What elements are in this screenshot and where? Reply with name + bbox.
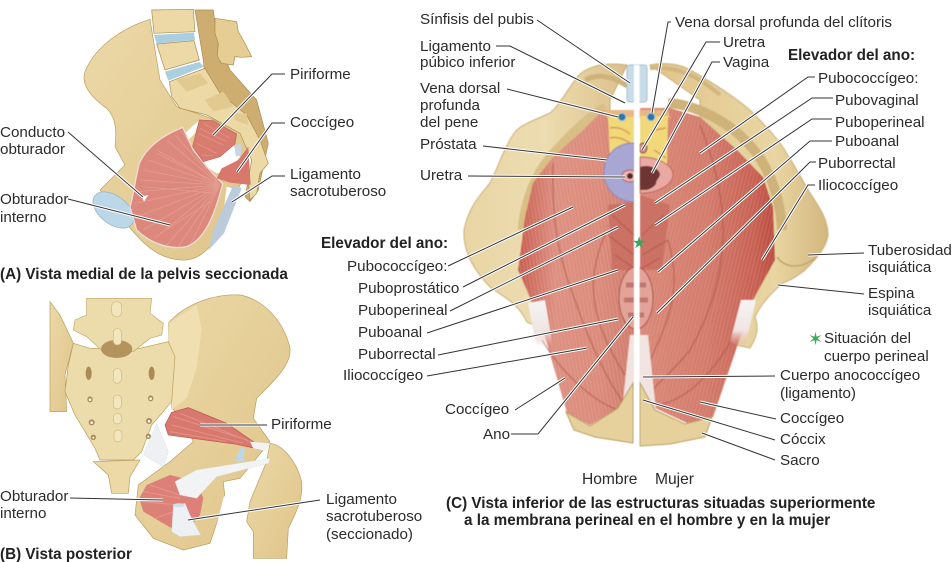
label: Sínfisis del pubis: Sínfisis del pubis — [420, 11, 534, 28]
femur — [247, 443, 302, 558]
left levator muscle — [518, 110, 634, 425]
right muscle fibres — [640, 108, 775, 423]
panel: B posterior view — [0, 295, 422, 562]
illustration: posterior pelvis — [50, 295, 302, 558]
label: Vena dorsal profunda del pene: profunda — [420, 97, 481, 114]
label: Uretra: Uretra — [723, 34, 766, 51]
leader lines A — [68, 74, 285, 225]
left dorsal vein — [618, 113, 626, 121]
leader lines B — [70, 425, 320, 520]
white ligament sacrospinous — [143, 423, 168, 467]
tuberosity crease — [777, 257, 817, 266]
obturator internus muscle — [139, 475, 203, 532]
label: Iliococcígeo: Iliococcígeo — [343, 367, 423, 384]
posterior elements of vertebrae — [215, 18, 252, 65]
obturator fibres — [135, 132, 220, 247]
white opening — [185, 120, 240, 213]
vertebra 1 — [152, 9, 195, 33]
label: Vena dorsal profunda del clítoris: Vena dorsal profunda del clítoris — [675, 14, 892, 31]
sacral foramina — [86, 367, 155, 440]
label: Obturador interno: Obturador — [0, 488, 68, 505]
perineal body star: ★ — [632, 233, 646, 252]
label: Tuberosidad isquiática: isquiática — [868, 259, 932, 276]
muscle dividing folds — [542, 125, 745, 410]
fat strands — [610, 127, 666, 158]
piriformis fibres — [170, 413, 250, 443]
sacral rear column — [195, 10, 268, 202]
label: Situación del cuerpo perineal: cuerpo perineal — [824, 348, 929, 365]
heading C: (C) Vista inferior de las estructuras situadas superiormente — [446, 495, 875, 512]
heading: Elevador del ano left: Elevador del ano: — [321, 235, 448, 252]
anal mucosa — [624, 285, 648, 315]
piriformis tendon — [250, 442, 270, 451]
label: Piriforme: Piriforme — [290, 66, 351, 83]
label: Sacro: Sacro — [780, 452, 820, 469]
panel: C inferior view — [321, 11, 952, 529]
left pubic crease — [585, 76, 627, 86]
female urethra — [639, 143, 647, 153]
cut end of ligament — [173, 503, 185, 507]
label: Ligamento sacrotuberoso seccionado: Ligamento — [326, 491, 397, 508]
fat tissue left — [608, 117, 634, 160]
fat tissue right — [640, 116, 668, 165]
label: Pubococcígeo: Pubococcígeo: — [818, 70, 918, 87]
label: Puboanal: Puboanal — [358, 324, 422, 341]
disc 1 — [154, 33, 195, 43]
label: Coccígeo: Coccígeo — [290, 114, 354, 131]
label: Vena dorsal profunda del pene: Vena dorsal — [420, 80, 500, 97]
label: Conducto obturador: obturador — [0, 141, 65, 158]
obturator fibres — [142, 485, 183, 518]
label: Uretra: Uretra — [420, 167, 463, 184]
right pelvic bone — [650, 64, 828, 348]
pubic ligament arch over fat — [603, 110, 670, 118]
left ilium fragment — [50, 302, 73, 412]
label: Puborrectal: Puborrectal — [358, 346, 436, 363]
white opening in hip bone — [210, 485, 247, 552]
label: Vena dorsal profunda del pene: del pene — [420, 114, 478, 131]
label: Ligamento sacrotuberoso seccionado: (seccionado) — [326, 526, 413, 543]
label: Cuerpo anococcígeo: Cuerpo anococcígeo — [780, 367, 920, 384]
obturator internus muscle — [130, 127, 223, 247]
vertebral canal — [101, 340, 132, 358]
sacrum — [65, 342, 175, 460]
right white ligament — [730, 300, 756, 347]
piriformis muscle — [193, 120, 237, 162]
small blue tendon — [235, 448, 245, 462]
illustration: medial pelvis — [84, 9, 268, 260]
right dorsal vein — [647, 113, 655, 121]
heading: Elevador del ano right: Elevador del ano: — [788, 47, 915, 64]
label: Situación del cuerpo perineal: Situación del — [824, 330, 911, 347]
label: Próstata: Próstata — [420, 136, 477, 153]
label: Conducto obturador: Conducto — [0, 124, 65, 141]
heading A: (A) Vista medial de la pelvis seccionada — [0, 266, 288, 283]
coccygeus muscle — [217, 147, 251, 185]
label: Hombre: Hombre — [582, 471, 637, 488]
legend star: ✶ — [808, 329, 823, 350]
label: Obturador interno: interno — [0, 209, 46, 226]
label: Puboanal: Puboanal — [835, 133, 899, 150]
heading C: a la membrana perineal en el hombre y en la mujer — [464, 512, 830, 529]
pubic symphysis — [86, 185, 140, 235]
label: Puborrectal: Puborrectal — [818, 155, 896, 172]
piriformis fibres — [197, 123, 230, 156]
vaginal lumen — [640, 166, 660, 190]
coccyx — [93, 460, 140, 493]
ilium and ischium bone — [84, 19, 253, 260]
right sacrum — [640, 383, 712, 446]
label: Coccígeo: Coccígeo — [780, 410, 844, 427]
central white divider — [634, 65, 640, 447]
tendon of gemelli — [175, 458, 270, 498]
label: Ligamento sacrotuberoso: Ligamento — [290, 166, 361, 183]
label: Ligamento púbico inferior: Ligamento — [420, 38, 491, 55]
label: Espina isquiática: isquiática — [868, 302, 932, 319]
label: Ligamento sacrotuberoso seccionado: sacrotuberoso — [326, 508, 422, 525]
label: Puboprostático: Puboprostático — [358, 280, 459, 297]
label: Mujer: Mujer — [655, 471, 694, 488]
illustration: inferior pelvic floor — [464, 64, 828, 447]
sacrotuberous ligament — [208, 185, 242, 251]
left muscle fibres — [518, 110, 634, 425]
perineal fibres — [608, 215, 668, 268]
right hip bone — [135, 295, 290, 550]
label: Puboperineal: Puboperineal — [835, 114, 925, 131]
label: Cóccix: Cóccix — [780, 431, 826, 448]
upper ligament strip — [234, 144, 242, 157]
right levator muscle — [640, 108, 775, 423]
vaginal wall — [640, 157, 673, 193]
left white ligament — [528, 300, 553, 347]
label: Ligamento sacrotuberoso: sacrotuberoso — [290, 183, 386, 200]
label: Ano: Ano — [483, 426, 510, 443]
right inner bone shading — [668, 103, 782, 230]
label: Espina isquiática: Espina — [868, 285, 914, 302]
label: Coccígeo: Coccígeo — [445, 401, 509, 418]
right pubic crease — [650, 68, 720, 95]
label: Vagina: Vagina — [723, 54, 770, 71]
label: Cuerpo anococcígeo: (ligamento) — [780, 385, 856, 402]
central anococcygeal ligament — [622, 335, 656, 410]
label: Piriforme: Piriforme — [271, 416, 332, 433]
piriformis muscle — [165, 408, 258, 449]
spinous processes — [112, 302, 122, 442]
label: Pubococcígeo: Pubococcígeo: — [347, 258, 447, 275]
label: Puboperineal: Puboperineal — [358, 302, 448, 319]
disc 2 — [165, 62, 204, 81]
label: Obturador interno: interno — [0, 505, 46, 522]
sacrum — [169, 68, 268, 200]
panel: A medial view of pelvis — [0, 9, 386, 283]
male urethra — [622, 170, 638, 182]
lumbar vertebra — [73, 298, 163, 352]
leader lines C — [427, 20, 864, 460]
label: Ligamento púbico inferior: púbico inferior — [420, 54, 515, 71]
label: Tuberosidad isquiática: Tuberosidad — [868, 242, 952, 259]
iliac crest rough area — [168, 305, 202, 410]
cut sacrotuberous ligament — [172, 503, 201, 537]
vertebra 2 — [157, 41, 199, 70]
foramina highlights — [89, 397, 152, 439]
pubic symphysis — [627, 65, 647, 102]
anal canal — [619, 267, 653, 329]
left inner bone shading — [522, 107, 605, 230]
prostate — [604, 143, 634, 202]
sacral body textures — [177, 73, 248, 125]
label: Iliococcígeo: Iliococcígeo — [818, 177, 898, 194]
obturator canal opening — [142, 195, 148, 202]
perineal muscles — [608, 195, 670, 270]
left sacrum — [566, 383, 633, 443]
male urethra lumen — [627, 173, 633, 179]
label: Pubovaginal: Pubovaginal — [835, 92, 919, 109]
label: Obturador interno: Obturador — [0, 191, 68, 208]
left pelvic bone — [464, 64, 627, 330]
